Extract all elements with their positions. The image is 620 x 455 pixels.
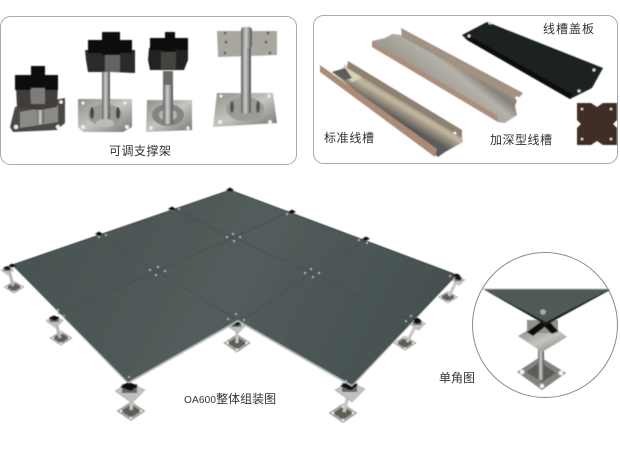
- square cover tile: [577, 103, 617, 145]
- panel: cable troughs: [314, 16, 618, 164]
- standard trough: [320, 61, 463, 157]
- pedestal photo 3: [146, 32, 192, 132]
- floor panels: [8, 188, 461, 390]
- detail circle: single corner: [472, 252, 618, 398]
- pedestal: front right: [393, 319, 426, 350]
- trough cover plate: [462, 22, 603, 99]
- detail pedestal: [517, 320, 567, 390]
- label: single corner view: 单角图: [439, 371, 475, 385]
- pedestal: bottom right corner: [328, 381, 365, 423]
- pedestal: left corner: [1, 266, 24, 294]
- assembled raised floor: [1, 188, 465, 423]
- detail floor corner: [483, 289, 610, 325]
- pedestal: bottom left corner: [115, 382, 146, 421]
- label: cover plate: 线槽盖板: [543, 22, 594, 36]
- pedestal photo 1: [10, 66, 65, 132]
- panel: adjustable pedestals: [0, 16, 296, 164]
- label: standard trough: 标准线槽: [324, 131, 374, 145]
- pedestal: inner notch: [223, 320, 251, 352]
- pedestal: front left: [46, 315, 73, 346]
- pedestal photo 4: [213, 27, 277, 127]
- caption: assembled floor: OA600整体组装图: [184, 391, 276, 406]
- pedestal: right corner: [438, 276, 465, 303]
- caption: adjustable pedestals: 可调支撑架: [109, 143, 171, 158]
- label: deep trough: 加深型线槽: [490, 133, 552, 147]
- pedestal photo 2: [78, 32, 135, 132]
- deep trough: [372, 28, 523, 123]
